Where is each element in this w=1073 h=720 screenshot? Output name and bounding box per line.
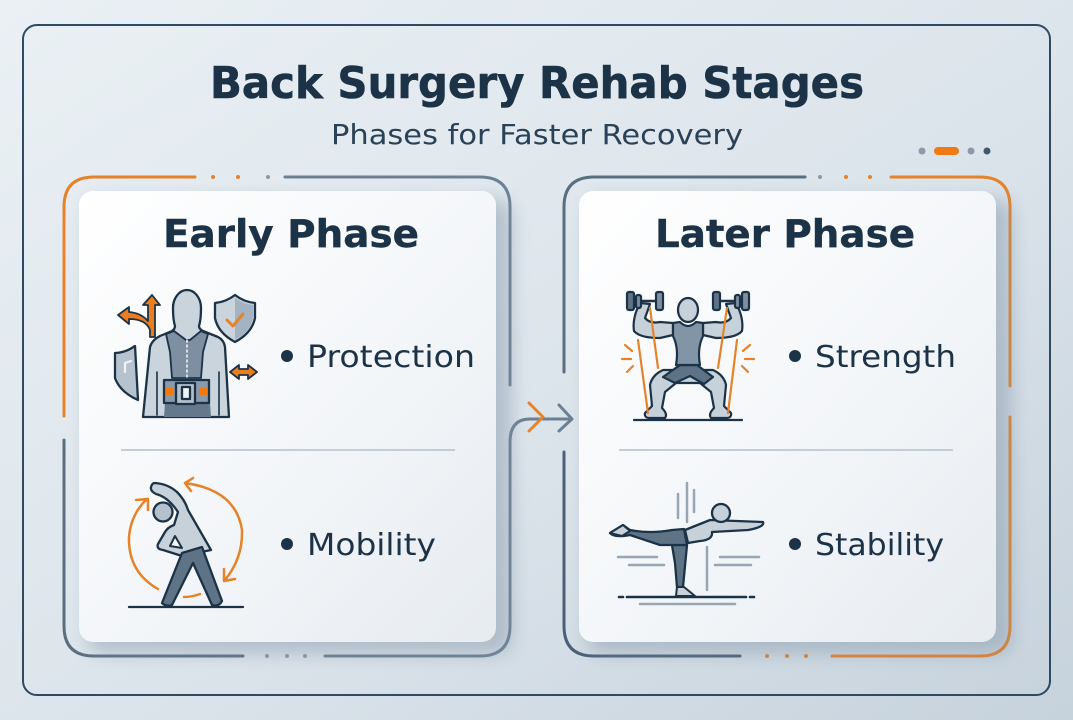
icon part: shorts — [663, 365, 713, 384]
divider — [121, 449, 455, 451]
heading: early phase: Early Phase — [163, 212, 419, 256]
panel: later phase card — [579, 191, 1012, 654]
icon: back brace with shields and arrows — [115, 290, 257, 417]
icon: one-leg balance — [610, 483, 763, 604]
icon part: head — [678, 298, 698, 322]
arrow: early to later phase — [529, 403, 572, 431]
icon part: tank top — [673, 322, 703, 365]
decorative progress dots — [918, 147, 990, 155]
icon part: dumbbells — [634, 300, 742, 302]
bullet and label: mobility: Mobility — [307, 528, 436, 563]
icon part: brace back panel — [166, 331, 208, 378]
heading: later phase: Later Phase — [655, 212, 915, 256]
icon part: double arrow — [230, 365, 257, 379]
title: Back Surgery Rehab Stages — [210, 58, 864, 109]
icon part: legs — [645, 370, 731, 418]
subtitle: Phases for Faster Recovery — [331, 118, 743, 151]
icon part: left shield — [115, 346, 138, 400]
icon part: belt — [164, 380, 209, 403]
panel: later phase bracket — [564, 175, 1010, 658]
divider — [619, 449, 953, 451]
bullet and label: strength: Strength — [815, 340, 956, 375]
icon part: bands and sparks — [622, 308, 754, 413]
icon: squat with dumbbells and bands — [622, 292, 754, 420]
panel: early phase bracket — [64, 175, 570, 658]
icon part: body — [143, 290, 229, 417]
icon part: lower body — [164, 403, 211, 417]
icon part: forked arrow — [118, 295, 160, 337]
icon part: right shield with check — [215, 295, 255, 342]
icon part: arms — [634, 303, 673, 338]
bullet and label: stability: Stability — [815, 528, 944, 563]
icon: side bend mobility — [129, 478, 243, 607]
panel: early phase card — [79, 191, 512, 654]
bullet and label: protection: Protection — [307, 340, 475, 375]
